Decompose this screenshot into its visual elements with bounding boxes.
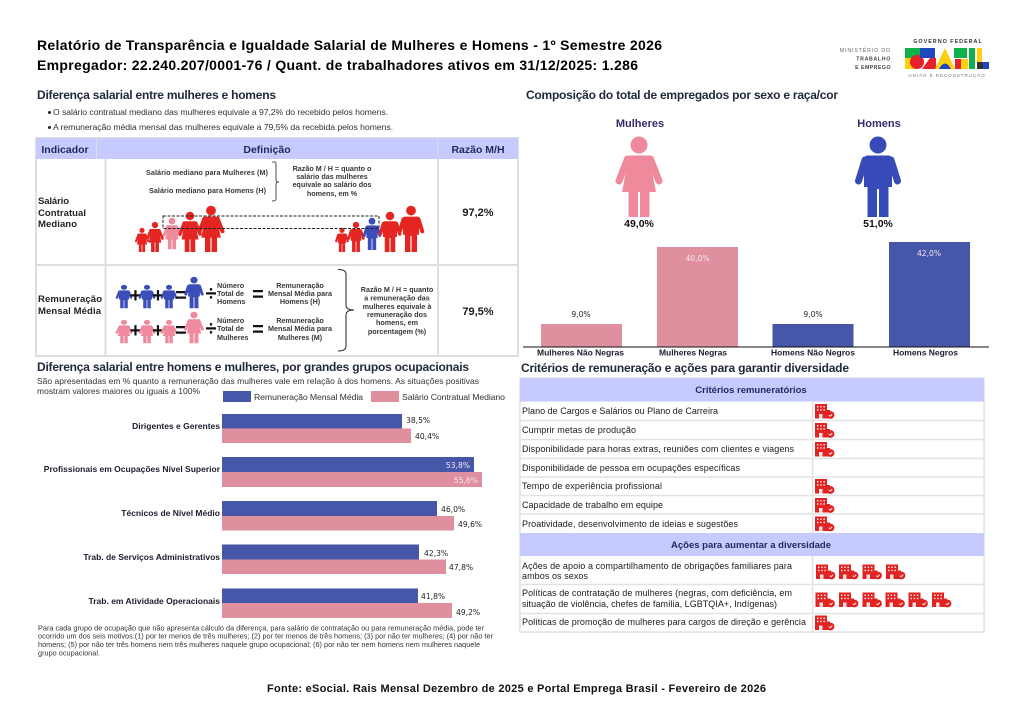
bullets: A remuneração média mensal das mulheres equivale a 79,5% da recebida pelos homens.	[53, 122, 393, 132]
diversity rows: ambos os sexos	[522, 571, 588, 581]
group: profissionais: 55,6%	[454, 476, 478, 485]
row: salário contratual mediano: homens, em %	[307, 189, 358, 198]
footnote	[38, 624, 494, 658]
diversity rows	[522, 561, 806, 627]
formula brace and ratio text: homens, em	[376, 318, 418, 327]
group: dirigentes: 40,4%	[415, 432, 439, 441]
formula: men: Homens (H)	[280, 297, 321, 306]
formula: women: =	[175, 320, 187, 342]
pictogram: mulheres: 49,0%	[624, 218, 655, 230]
formula brace and ratio text: Razão M / H = quanto	[361, 285, 434, 294]
footnote: grupo ocupacional.	[38, 648, 100, 658]
icons: diversity companies	[815, 564, 951, 630]
heading: critérios: Critérios de remuneração e ações para garantir diversidade	[521, 361, 849, 375]
formula: women: ÷	[206, 318, 217, 340]
formula: men	[117, 277, 333, 308]
group: dirigentes: Dirigentes e Gerentes	[132, 421, 220, 431]
group: operacionais: 49,2%	[456, 608, 480, 617]
logo: governo federal brasil: UNIÃO E RECONSTRUÇÃO	[908, 72, 986, 78]
title: Empregador: 22.240.207/0001-76 / Quant. de trabalhadores ativos em 31/12/2025: 1.286	[37, 57, 638, 73]
formula: women: +	[152, 320, 164, 342]
bullets: O salário contratual mediano das mulheres equivale a 97,2% do recebido pelos homens.	[53, 107, 388, 117]
table header: Razão M/H	[451, 144, 505, 156]
group: técnicos: Técnicos de Nível Médio	[121, 508, 220, 518]
bar chart: composição: Homens Negros	[893, 348, 958, 358]
formula brace and ratio text	[338, 270, 434, 351]
formula: women: Mensal Média para	[268, 324, 333, 333]
criteria rows	[522, 406, 794, 529]
legend	[223, 391, 505, 402]
group: técnicos: 46,0%	[441, 505, 465, 514]
group: profissionais: Profissionais em Ocupações Nível Superior	[44, 464, 221, 474]
formula brace and ratio text: remuneração dos	[367, 310, 427, 319]
pictogram: mulheres	[616, 118, 664, 230]
table header	[36, 138, 518, 159]
diversity rows: Ações de apoio a compartilhamento de obrigações familiares para	[522, 561, 792, 571]
formula: women: Mulheres (M)	[278, 333, 323, 342]
panel: criteria table	[520, 378, 984, 632]
row: remuneração mensal média: Mensal Média	[38, 306, 102, 317]
criteria rows: Disponibilidade para horas extras, reuniões com clientes e viagens	[522, 444, 794, 454]
row: salário contratual mediano	[38, 162, 494, 230]
chart description: mostram valores maiores ou iguais a 100%	[37, 386, 200, 396]
formula: men: Mensal Média para	[268, 289, 333, 298]
row: remuneração mensal média	[38, 294, 494, 318]
group: dirigentes: 38,5%	[406, 416, 430, 425]
table header: Definição	[243, 144, 291, 156]
source footer: Fonte: eSocial. Rais Mensal Dezembro de 2025 e Portal Emprega Brasil - Fevereiro de 2026	[267, 683, 766, 695]
formula: women	[117, 312, 333, 343]
footnote: ocorrido um dos seis motivos:(1) por ter menos de três mulheres; (2) por ter menos de três homens; (3) por não ter mulheres; (4) por não ter	[38, 632, 494, 640]
group: administrativos: 42,3%	[424, 549, 448, 558]
table header: Indicador	[41, 144, 89, 156]
formula: men: Remuneração	[276, 281, 324, 290]
formula: women: +	[130, 320, 141, 342]
row: salário contratual mediano: Salário mediano para Mulheres (M)	[146, 168, 269, 177]
legend: Salário Contratual Mediano	[402, 392, 505, 402]
row: salário contratual mediano: salário das mulheres	[296, 172, 368, 181]
diversity rows: Políticas de promoção de mulheres para cargos de direção e gerência	[522, 617, 806, 627]
icons: criteria companies	[815, 404, 834, 531]
formula: men: Total de	[217, 289, 244, 298]
diversity header: Ações para aumentar a diversidade	[671, 540, 831, 551]
row: salário contratual mediano: equivale ao salário dos	[292, 180, 372, 189]
formula: women: Número	[217, 316, 245, 325]
criteria header: Critérios remuneratórios	[695, 385, 807, 396]
pictogram: homens: Homens	[857, 118, 901, 130]
bullets	[48, 107, 393, 132]
bar chart: composição: 9,0%	[571, 310, 591, 319]
row: remuneração mensal média: 79,5%	[462, 306, 494, 318]
icon: men figures	[336, 206, 422, 252]
diversity header	[520, 533, 984, 556]
formula: men: ÷	[206, 283, 217, 305]
diversity rows: situação de violência, chefes de família, LGBTQIA+, Indígenas)	[522, 599, 777, 609]
logo: ministério: TRABALHO	[856, 56, 891, 62]
footnote: Para cada grupo de ocupação que não apresenta cálculo da diferença, para salário de contratação ou para remuneração média, pode ter	[38, 624, 485, 632]
bar chart: grupos ocupacionais	[44, 414, 482, 618]
group: técnicos: 49,6%	[458, 520, 482, 529]
formula brace and ratio text: porcentagem (%)	[368, 327, 427, 336]
bar chart: composição: 9,0%	[803, 310, 823, 319]
group: dirigentes	[132, 414, 439, 443]
footnote: homens; (5) por não ter três homens nem três mulheres naquele grupo ocupacional; (6) por não ter nem homens nem mulheres naquele	[38, 640, 480, 649]
group: profissionais: 53,8%	[446, 461, 470, 470]
row: salário contratual mediano: Contratual	[38, 208, 86, 219]
bar chart: composição: Mulheres Não Negras	[537, 348, 624, 358]
pictogram: mulheres: Mulheres	[616, 118, 664, 130]
row: salário contratual mediano: Razão M / H = quanto o	[293, 164, 372, 173]
logo: ministério: E EMPREGO	[855, 65, 891, 71]
heading: composição: Composição do total de empregados por sexo e raça/cor	[526, 88, 838, 102]
logo: ministério: MINISTÉRIO DO	[840, 47, 891, 54]
bar chart: composição: 42,0%	[917, 249, 941, 258]
group: administrativos	[83, 544, 473, 574]
group: administrativos: Trab. de Serviços Administrativos	[83, 552, 220, 562]
formula: women: =	[252, 319, 264, 341]
icon: women figures	[136, 206, 222, 252]
formula: men: =	[175, 285, 187, 307]
formula brace and ratio text: mulheres equivale à	[363, 302, 432, 311]
criteria rows: Tempo de experiência profissional	[522, 481, 662, 491]
criteria rows: Capacidade de trabalho em equipe	[522, 500, 663, 510]
logo: governo federal brasil	[905, 39, 989, 78]
bar chart: composição	[523, 242, 989, 358]
bar chart: composição: 40,0%	[685, 254, 710, 263]
median dashed box	[163, 216, 379, 228]
formula: women: Total de	[217, 324, 244, 333]
chart description	[37, 376, 479, 396]
heading: diferença salarial: Diferença salarial entre mulheres e homens	[37, 88, 276, 102]
formula: men: Homens	[217, 297, 245, 306]
criteria rows: Cumprir metas de produção	[522, 425, 636, 435]
criteria rows: Proatividade, desenvolvimento de ideias e sugestões	[522, 519, 738, 529]
group: operacionais: 41,8%	[421, 592, 445, 601]
bar chart: composição: Mulheres Negras	[659, 348, 727, 358]
title: Relatório de Transparência e Igualdade Salarial de Mulheres e Homens - 1º Semestre 2026	[37, 37, 662, 53]
heading: grupos ocupacionais: Diferença salarial entre homens e mulheres, por grandes grupos ocupacionais	[37, 360, 469, 374]
row: salário contratual mediano: Mediano	[38, 219, 77, 230]
group: técnicos	[121, 501, 482, 530]
formula: men: +	[130, 285, 141, 307]
criteria rows: Plano de Cargos e Salários ou Plano de Carreira	[522, 406, 718, 416]
pictogram: homens	[857, 118, 901, 230]
title	[37, 37, 662, 73]
panel: indicator table	[36, 138, 518, 356]
group: operacionais: Trab. em Atividade Operacionais	[89, 596, 220, 606]
chart description: São apresentadas em % quanto a remuneração das mulheres vale em relação à dos homens. As situações positivas	[37, 376, 479, 386]
bar chart: composição: Homens Não Negros	[771, 348, 855, 358]
pictogram: homens: 51,0%	[863, 218, 894, 230]
diversity rows: Políticas de contratação de mulheres (negras, com deficiência, em	[522, 588, 792, 598]
formula: men: +	[152, 285, 164, 307]
criteria rows: Disponibilidade de pessoa em ocupações específicas	[522, 463, 740, 473]
formula: men: Número	[217, 281, 245, 290]
formula: men: =	[252, 284, 264, 306]
formula: women: Mulheres	[217, 333, 249, 342]
legend: Remuneração Mensal Média	[254, 392, 363, 402]
logo: governo federal brasil: GOVERNO FEDERAL	[913, 39, 983, 45]
row: salário contratual mediano: Salário mediano para Homens (H)	[149, 186, 267, 195]
row: salário contratual mediano: Salário	[38, 196, 69, 207]
formula: women: Remuneração	[276, 316, 324, 325]
row: salário contratual mediano: 97,2%	[462, 207, 494, 219]
group: administrativos: 47,8%	[449, 563, 473, 572]
logo: ministério	[840, 47, 891, 71]
row: remuneração mensal média: Remuneração	[38, 294, 102, 305]
group: operacionais	[89, 588, 480, 618]
criteria header	[520, 378, 984, 402]
group: profissionais	[44, 457, 482, 487]
formula brace and ratio text: a remuneração das	[364, 294, 430, 302]
